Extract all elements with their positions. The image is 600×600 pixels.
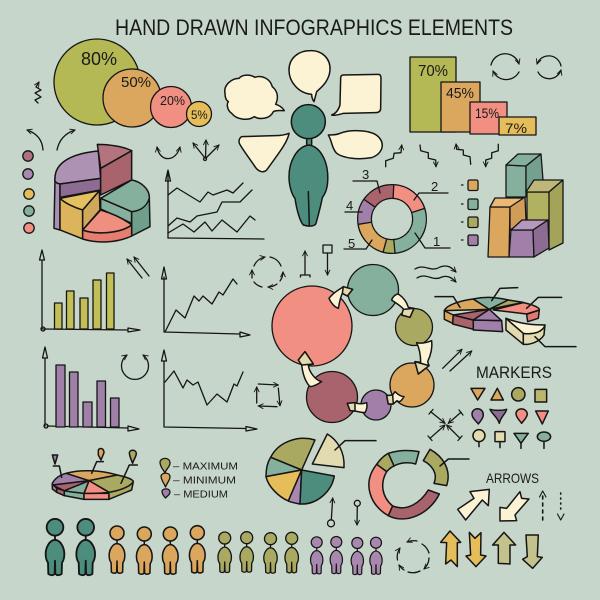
stepped bar chart with percentages: 70% (418, 63, 448, 80)
icon: arrow from circle down (354, 500, 360, 525)
bubble chart: percentage circles (54, 39, 212, 128)
pie chart with exploded slice (266, 434, 376, 504)
legend: pin key (160, 458, 238, 500)
icon: dotted arrows (540, 491, 564, 520)
segmented ring chart (369, 449, 469, 519)
donut chart with numbered leaders (344, 167, 450, 257)
icon: arrow from circle up (328, 498, 334, 527)
icon: curved arrows (27, 130, 75, 150)
icon: three-way arrows (193, 140, 219, 160)
3D stacked boxes (488, 154, 563, 257)
legend dots (23, 151, 34, 233)
stepped bar chart with percentages: 15% (475, 105, 499, 121)
speech bubbles (225, 51, 382, 172)
markers grid (471, 388, 551, 448)
stepped bar chart with percentages: 7% (505, 120, 527, 136)
icon: double diagonal arrows (127, 257, 149, 278)
central person figure (289, 105, 328, 226)
icon: wave arrows (415, 266, 456, 282)
bar chart: purple (42, 347, 139, 431)
title: HAND DRAWN INFOGRAPHICS ELEMENTS (115, 15, 513, 40)
icon: double diagonal arrows up-right (443, 349, 472, 371)
line chart: fluctuating (162, 350, 257, 431)
3D pie chart (54, 144, 150, 242)
icon: up and down arrows (300, 245, 332, 277)
donut chart with numbered leaders: 2 (431, 179, 438, 194)
legend: pin key: – MINIMUM (173, 474, 236, 486)
icon: dashed circle arrows (397, 541, 429, 573)
bubble chart: percentage circles: 50% (121, 74, 151, 91)
donut chart with numbered leaders: 3 (362, 167, 369, 182)
process chain: connected circles (272, 264, 434, 422)
people row: orange (109, 526, 205, 574)
people row: purple (311, 536, 382, 575)
icon: small zigzag arrow (35, 82, 41, 103)
icon: zigzag step arrows (386, 144, 498, 167)
icon: dashed cycle arrows (252, 257, 283, 287)
bar chart: yellow (40, 250, 140, 332)
legend: pin key: – MAXIMUM (173, 460, 238, 472)
line chart: rising (162, 267, 250, 337)
icon: open cycle arrow (121, 355, 148, 379)
stepped bar chart with percentages: 45% (446, 85, 474, 102)
line chart: three series (166, 170, 264, 239)
heading: arrows: ARROWS (486, 470, 539, 486)
icon: converging cross arrows (428, 410, 463, 440)
icon: square cycle arrows (257, 384, 280, 407)
bubble chart: percentage circles: 20% (160, 94, 185, 108)
icon: smile arrow (157, 147, 180, 159)
block arrows (441, 489, 542, 568)
bubble chart: percentage circles: 5% (191, 110, 208, 122)
people row: teal (46, 519, 95, 575)
icon: cycle arrows (491, 54, 561, 80)
people row: olive (218, 532, 298, 573)
3D pie chart with exploded slice (435, 288, 576, 347)
donut chart with numbered leaders: 1 (433, 234, 440, 249)
bubble chart: percentage circles: 80% (81, 49, 117, 69)
flat 3D pie chart with pins (52, 449, 137, 499)
legend: pin key: – MEDIUM (174, 488, 228, 500)
stepped bar chart with percentages (410, 57, 536, 136)
heading: markers: MARKERS (476, 363, 552, 382)
legend squares (462, 180, 478, 246)
donut chart with numbered leaders: 5 (348, 236, 355, 251)
donut chart with numbered leaders: 4 (346, 198, 353, 213)
